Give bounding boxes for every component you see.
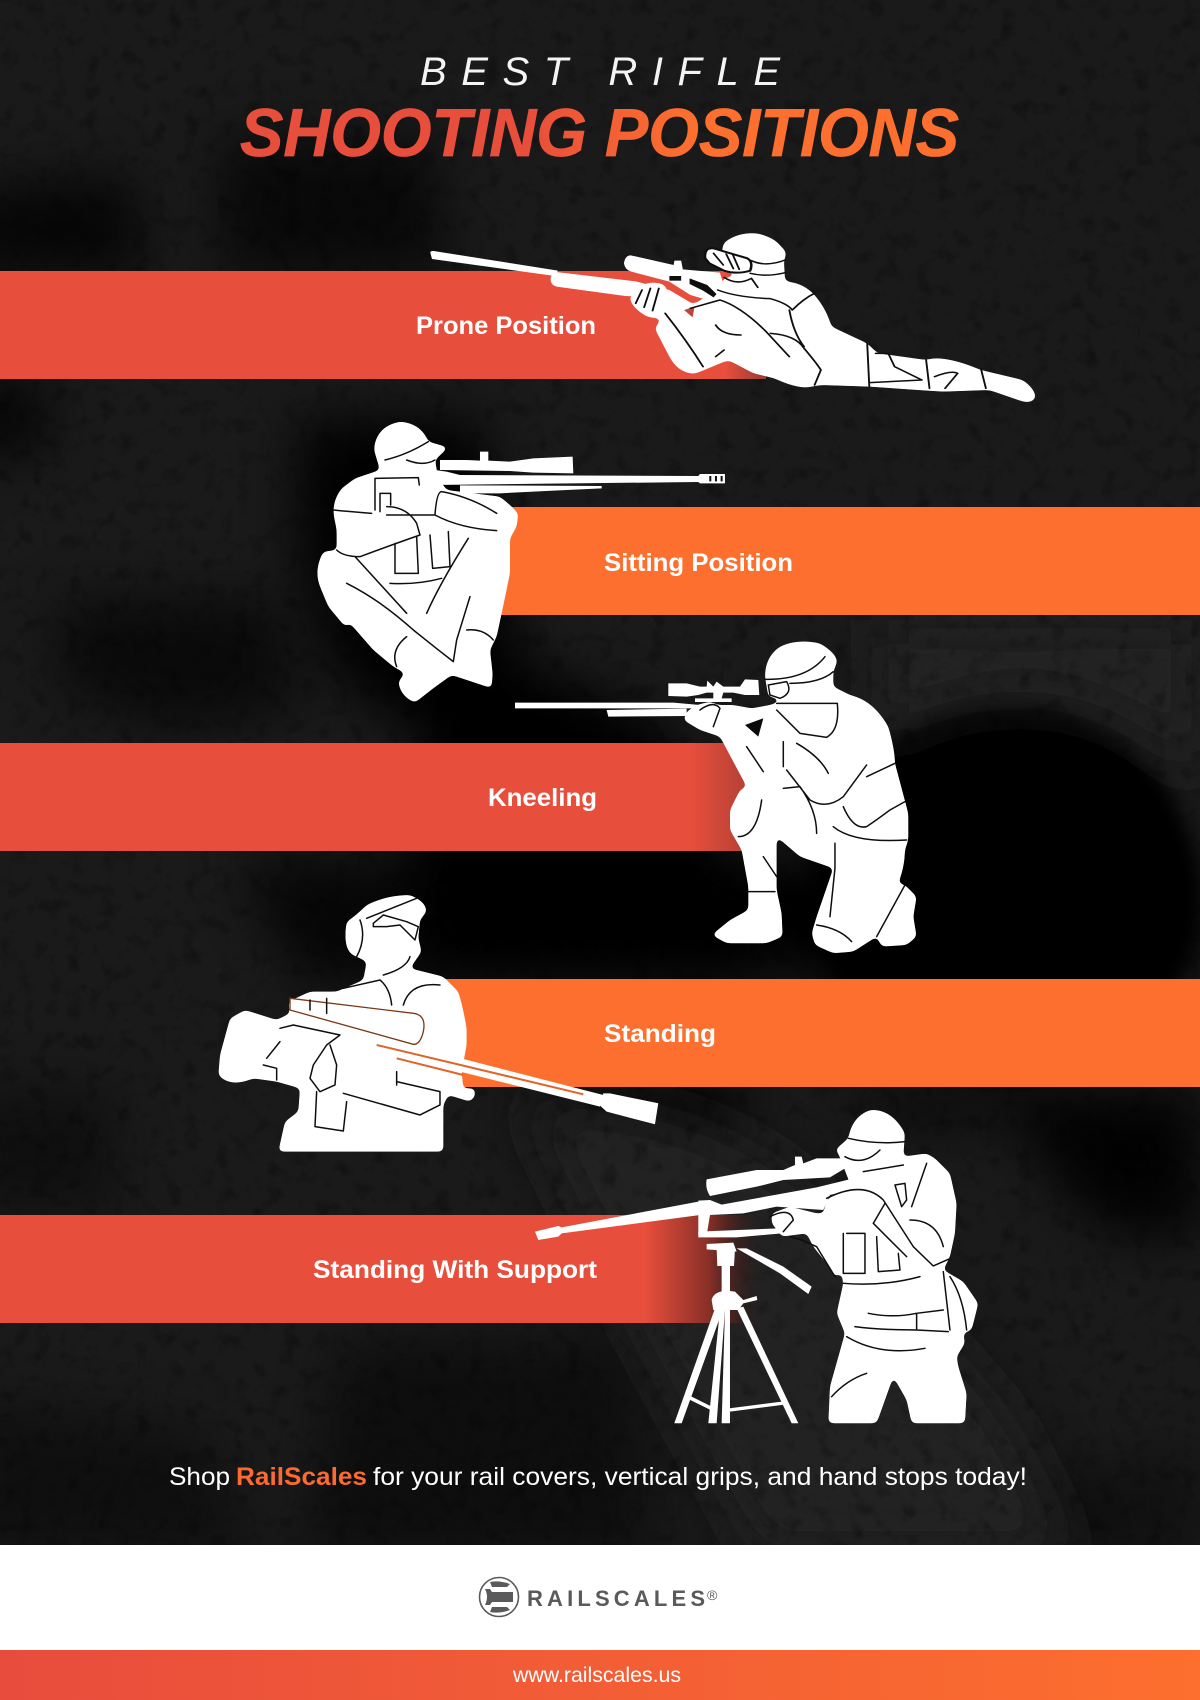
suit detail lines	[636, 253, 986, 388]
title line one: BEST RIFLE	[420, 50, 781, 94]
band: standing with support	[0, 1215, 760, 1323]
rifle barrel and muzzle	[353, 1037, 658, 1124]
call to action text: RailScales	[236, 1463, 367, 1491]
call to action text: for your rail covers, vertical grips, and hand stops today!	[373, 1463, 1027, 1491]
body silhouette	[317, 422, 518, 703]
icon: kneeling shooter	[515, 641, 917, 953]
band: kneeling	[0, 743, 770, 851]
body silhouette	[772, 1110, 978, 1423]
band: sitting position	[490, 507, 1200, 615]
footer: logo panel	[0, 1545, 1200, 1650]
rifle barrel and scope	[430, 251, 724, 307]
logo wordmark: RAILSCALES	[527, 1586, 705, 1611]
icon: sitting shooter	[317, 422, 725, 703]
body silhouette	[218, 895, 475, 1152]
rifle and scope	[433, 452, 725, 493]
website url: www.railscales.us	[512, 1664, 681, 1687]
body silhouette	[629, 233, 1036, 402]
band: prone position	[0, 271, 766, 379]
title	[240, 50, 959, 171]
icon: standing shooter	[218, 895, 658, 1152]
body silhouette	[683, 641, 917, 953]
tripod	[674, 1228, 812, 1423]
label: sitting position: Sitting Position	[604, 549, 793, 577]
muzzle holes	[709, 476, 723, 481]
label: standing: Standing	[604, 1020, 716, 1048]
label: standing with support: Standing With Support	[313, 1256, 598, 1284]
rifle gap wedge	[745, 718, 763, 737]
goggles	[705, 248, 751, 273]
rifle and scope	[515, 679, 759, 717]
rifle and scope	[535, 1157, 907, 1240]
title line two: SHOOTING POSITIONS	[240, 95, 959, 171]
clothing detail lines	[333, 442, 497, 667]
icon: standing shooter with tripod	[535, 1110, 978, 1423]
icon: prone shooter	[430, 233, 1036, 402]
label: prone position: Prone Position	[416, 312, 596, 340]
rifle action detail	[669, 276, 717, 317]
band: standing	[440, 979, 1200, 1087]
clothing detail lines	[263, 898, 440, 1131]
scope tube	[290, 998, 424, 1044]
clothing detail lines	[770, 1138, 967, 1397]
call to action text: Shop	[169, 1463, 230, 1491]
clothing detail lines	[700, 657, 907, 942]
label: kneeling: Kneeling	[488, 784, 597, 812]
footer: website bar	[0, 1650, 1200, 1700]
registered mark: ®	[707, 1587, 718, 1603]
icon: logo mark	[480, 1578, 518, 1616]
